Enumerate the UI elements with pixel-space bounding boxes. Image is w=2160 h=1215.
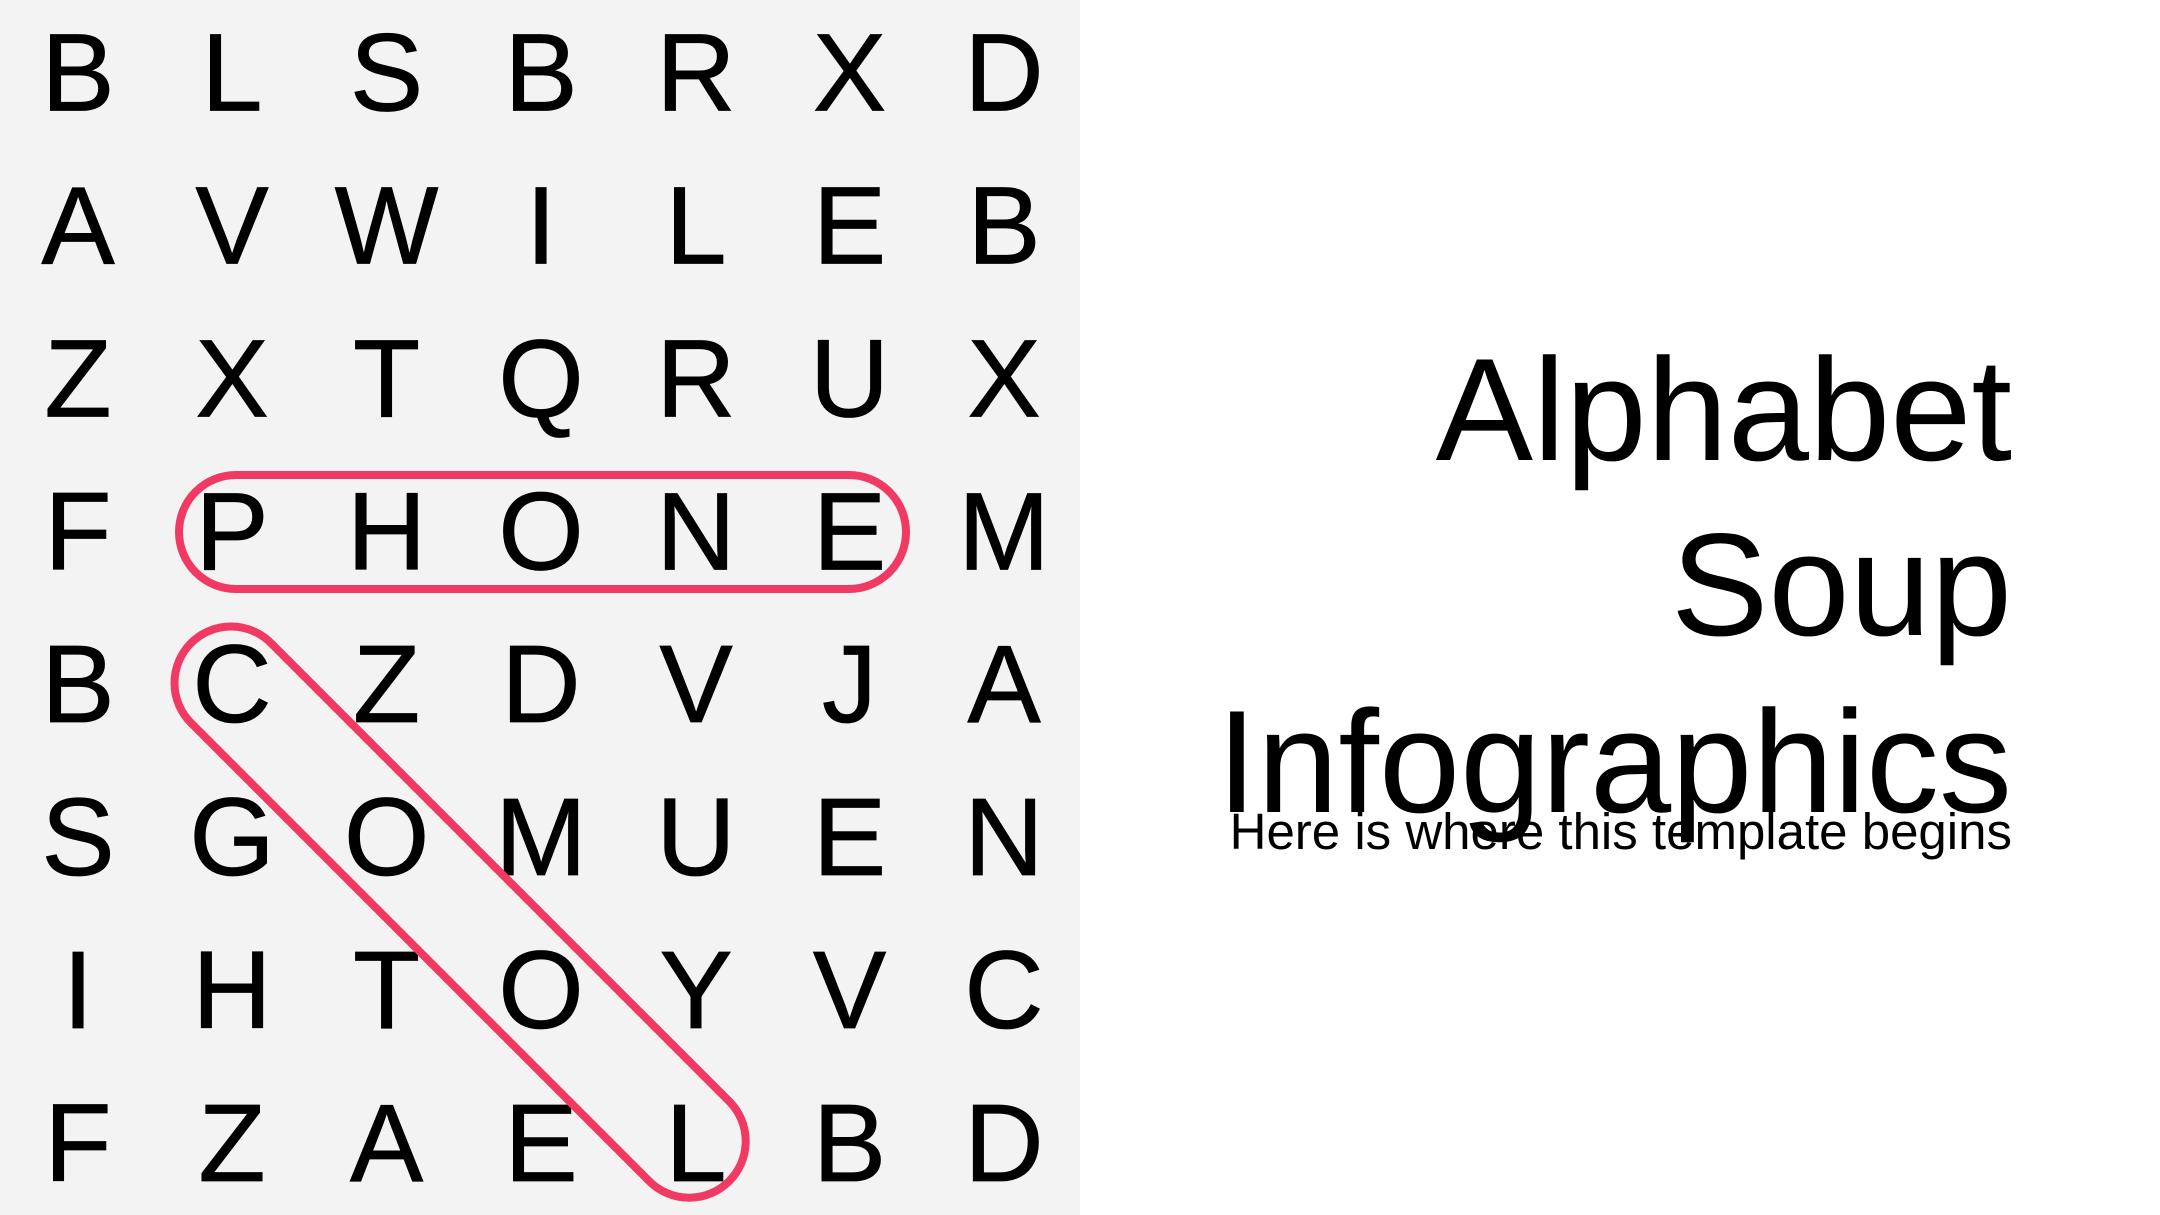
letter grid: E bbox=[813, 776, 886, 899]
letter grid: V bbox=[195, 164, 269, 288]
letter grid: E bbox=[813, 470, 886, 594]
letter grid: E bbox=[813, 164, 886, 288]
letter grid: R bbox=[656, 318, 736, 440]
letter grid: Y bbox=[659, 929, 733, 1052]
letter grid: S bbox=[41, 776, 115, 899]
letter grid: U bbox=[810, 318, 889, 440]
letter grid: Z bbox=[198, 1082, 266, 1205]
letter grid: T bbox=[353, 929, 420, 1052]
highlight: COOL diagonal bbox=[151, 603, 769, 1215]
letter grid: J bbox=[822, 623, 877, 746]
letter grid: U bbox=[656, 776, 736, 899]
letter grid: W bbox=[335, 164, 439, 288]
letter grid: N bbox=[964, 776, 1044, 899]
letter grid: L bbox=[201, 12, 263, 134]
letter grid: C bbox=[192, 623, 272, 746]
letter grid: I bbox=[63, 929, 93, 1052]
letter grid: I bbox=[526, 164, 556, 288]
letter grid: P bbox=[195, 470, 269, 594]
letter grid: C bbox=[964, 929, 1044, 1052]
letter grid: Q bbox=[498, 318, 584, 440]
letter grid: B bbox=[41, 623, 115, 746]
letter grid: L bbox=[665, 1082, 727, 1205]
letter grid: B bbox=[504, 12, 578, 134]
letter grid: X bbox=[813, 12, 886, 134]
letter grid: M bbox=[958, 470, 1050, 594]
letter grid: M bbox=[495, 776, 587, 899]
letter grid: R bbox=[656, 12, 736, 134]
letter grid: A bbox=[350, 1082, 424, 1205]
title: Soup bbox=[1671, 503, 2012, 666]
letter grid: F bbox=[44, 470, 112, 594]
letter grid: B bbox=[41, 12, 115, 134]
letter grid: A bbox=[41, 164, 115, 288]
letter grid: G bbox=[189, 776, 275, 899]
letter grid: A bbox=[967, 623, 1041, 746]
letter grid: N bbox=[656, 470, 736, 594]
letter grid: L bbox=[665, 164, 727, 288]
letter grid: D bbox=[964, 12, 1044, 134]
letter grid bbox=[41, 12, 1050, 1205]
letter grid: E bbox=[504, 1082, 578, 1205]
letter grid: V bbox=[659, 623, 733, 746]
letter grid: D bbox=[964, 1082, 1044, 1205]
letter grid: X bbox=[967, 318, 1041, 440]
letter grid: T bbox=[353, 318, 420, 440]
letter grid: H bbox=[192, 929, 272, 1052]
letter grid: O bbox=[344, 776, 429, 899]
letter grid: O bbox=[498, 470, 584, 594]
letter grid: D bbox=[501, 623, 581, 746]
letter grid: F bbox=[44, 1082, 112, 1205]
title: Alphabet bbox=[1436, 328, 2012, 491]
letter grid: B bbox=[813, 1082, 886, 1205]
letter grid: S bbox=[350, 12, 423, 134]
highlight: PHONE bbox=[179, 475, 906, 589]
letter grid: V bbox=[813, 929, 886, 1052]
panel: letter grid background bbox=[0, 0, 1080, 1215]
title: Infographics bbox=[1217, 680, 2012, 843]
letter grid: O bbox=[498, 929, 584, 1052]
letter grid: H bbox=[347, 470, 426, 594]
letter grid: Z bbox=[44, 318, 112, 440]
letter grid: X bbox=[195, 318, 269, 440]
letter grid: Z bbox=[353, 623, 420, 746]
letter grid: B bbox=[967, 164, 1041, 288]
subtitle: Here is where this template begins bbox=[1230, 803, 2012, 860]
